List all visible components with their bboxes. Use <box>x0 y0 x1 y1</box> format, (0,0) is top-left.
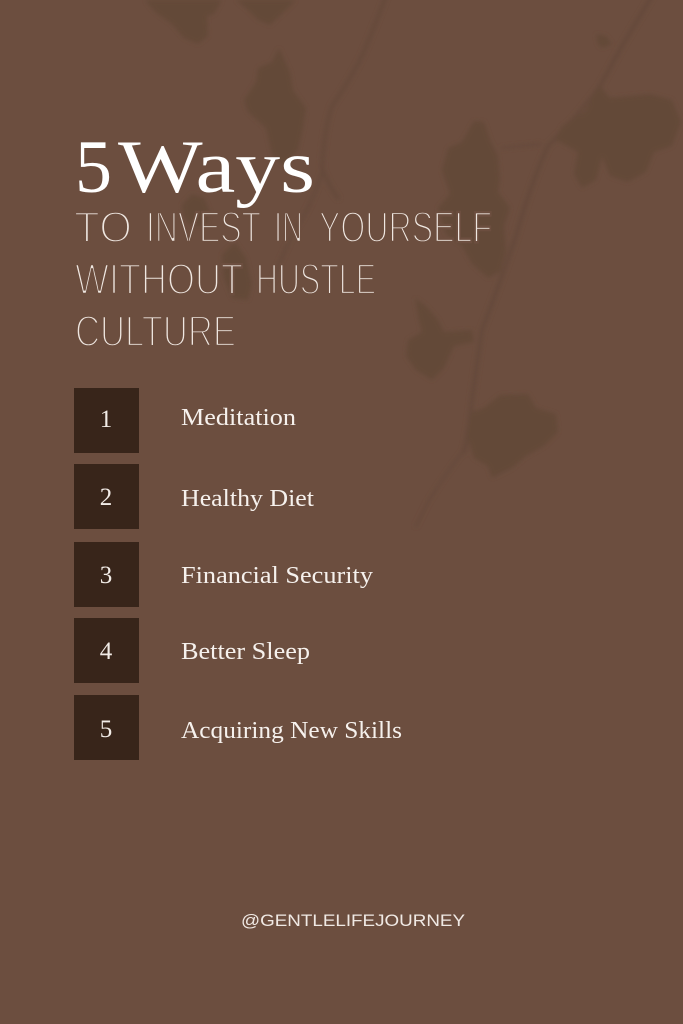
heading: 5 Ways: Ways <box>118 126 315 209</box>
title <box>74 126 492 356</box>
heading: 5 Ways: 5 <box>75 126 112 209</box>
item 3: Financial Security: Financial Security <box>181 563 373 589</box>
item 4: Better Sleep: 4 <box>100 638 113 665</box>
subtitle line 2: HUSTLE <box>256 255 376 304</box>
subtitle line 1: TO <box>74 203 132 252</box>
subtitle line 2: WITHOUT <box>75 255 243 304</box>
item 2: Healthy Diet: Healthy Diet <box>181 486 314 512</box>
item 2: Healthy Diet <box>74 464 314 529</box>
item 1: Meditation: 1 <box>100 406 112 433</box>
subtitle line 2 <box>75 255 376 304</box>
item 1: Meditation <box>74 388 296 453</box>
item 5: Acquiring New Skills: 5 <box>100 716 112 743</box>
subtitle line 1: INVEST <box>146 203 261 252</box>
footer handle: @GENTLELIFEJOURNEY <box>241 911 465 930</box>
shadow foliage: branches and blossoms <box>145 0 681 526</box>
branches <box>272 0 652 526</box>
list of five ways <box>74 388 402 760</box>
subtitle line 3: CULTURE <box>75 307 236 356</box>
heading: 5 Ways <box>75 126 315 209</box>
subtitle line 1: IN <box>274 203 303 252</box>
item 2: Healthy Diet: 2 <box>100 484 112 511</box>
item 4: Better Sleep <box>74 618 310 683</box>
subtitle line 1: YOURSELF <box>319 203 492 252</box>
item 3: Financial Security <box>74 542 373 607</box>
blossoms <box>145 0 681 478</box>
item 1: Meditation: Meditation <box>181 405 296 431</box>
item 3: Financial Security: 3 <box>100 562 112 589</box>
subtitle line 1 <box>74 203 492 252</box>
item 5: Acquiring New Skills: Acquiring New Skills <box>181 718 402 744</box>
item 5: Acquiring New Skills <box>74 695 402 760</box>
item 4: Better Sleep: Better Sleep <box>181 639 310 665</box>
